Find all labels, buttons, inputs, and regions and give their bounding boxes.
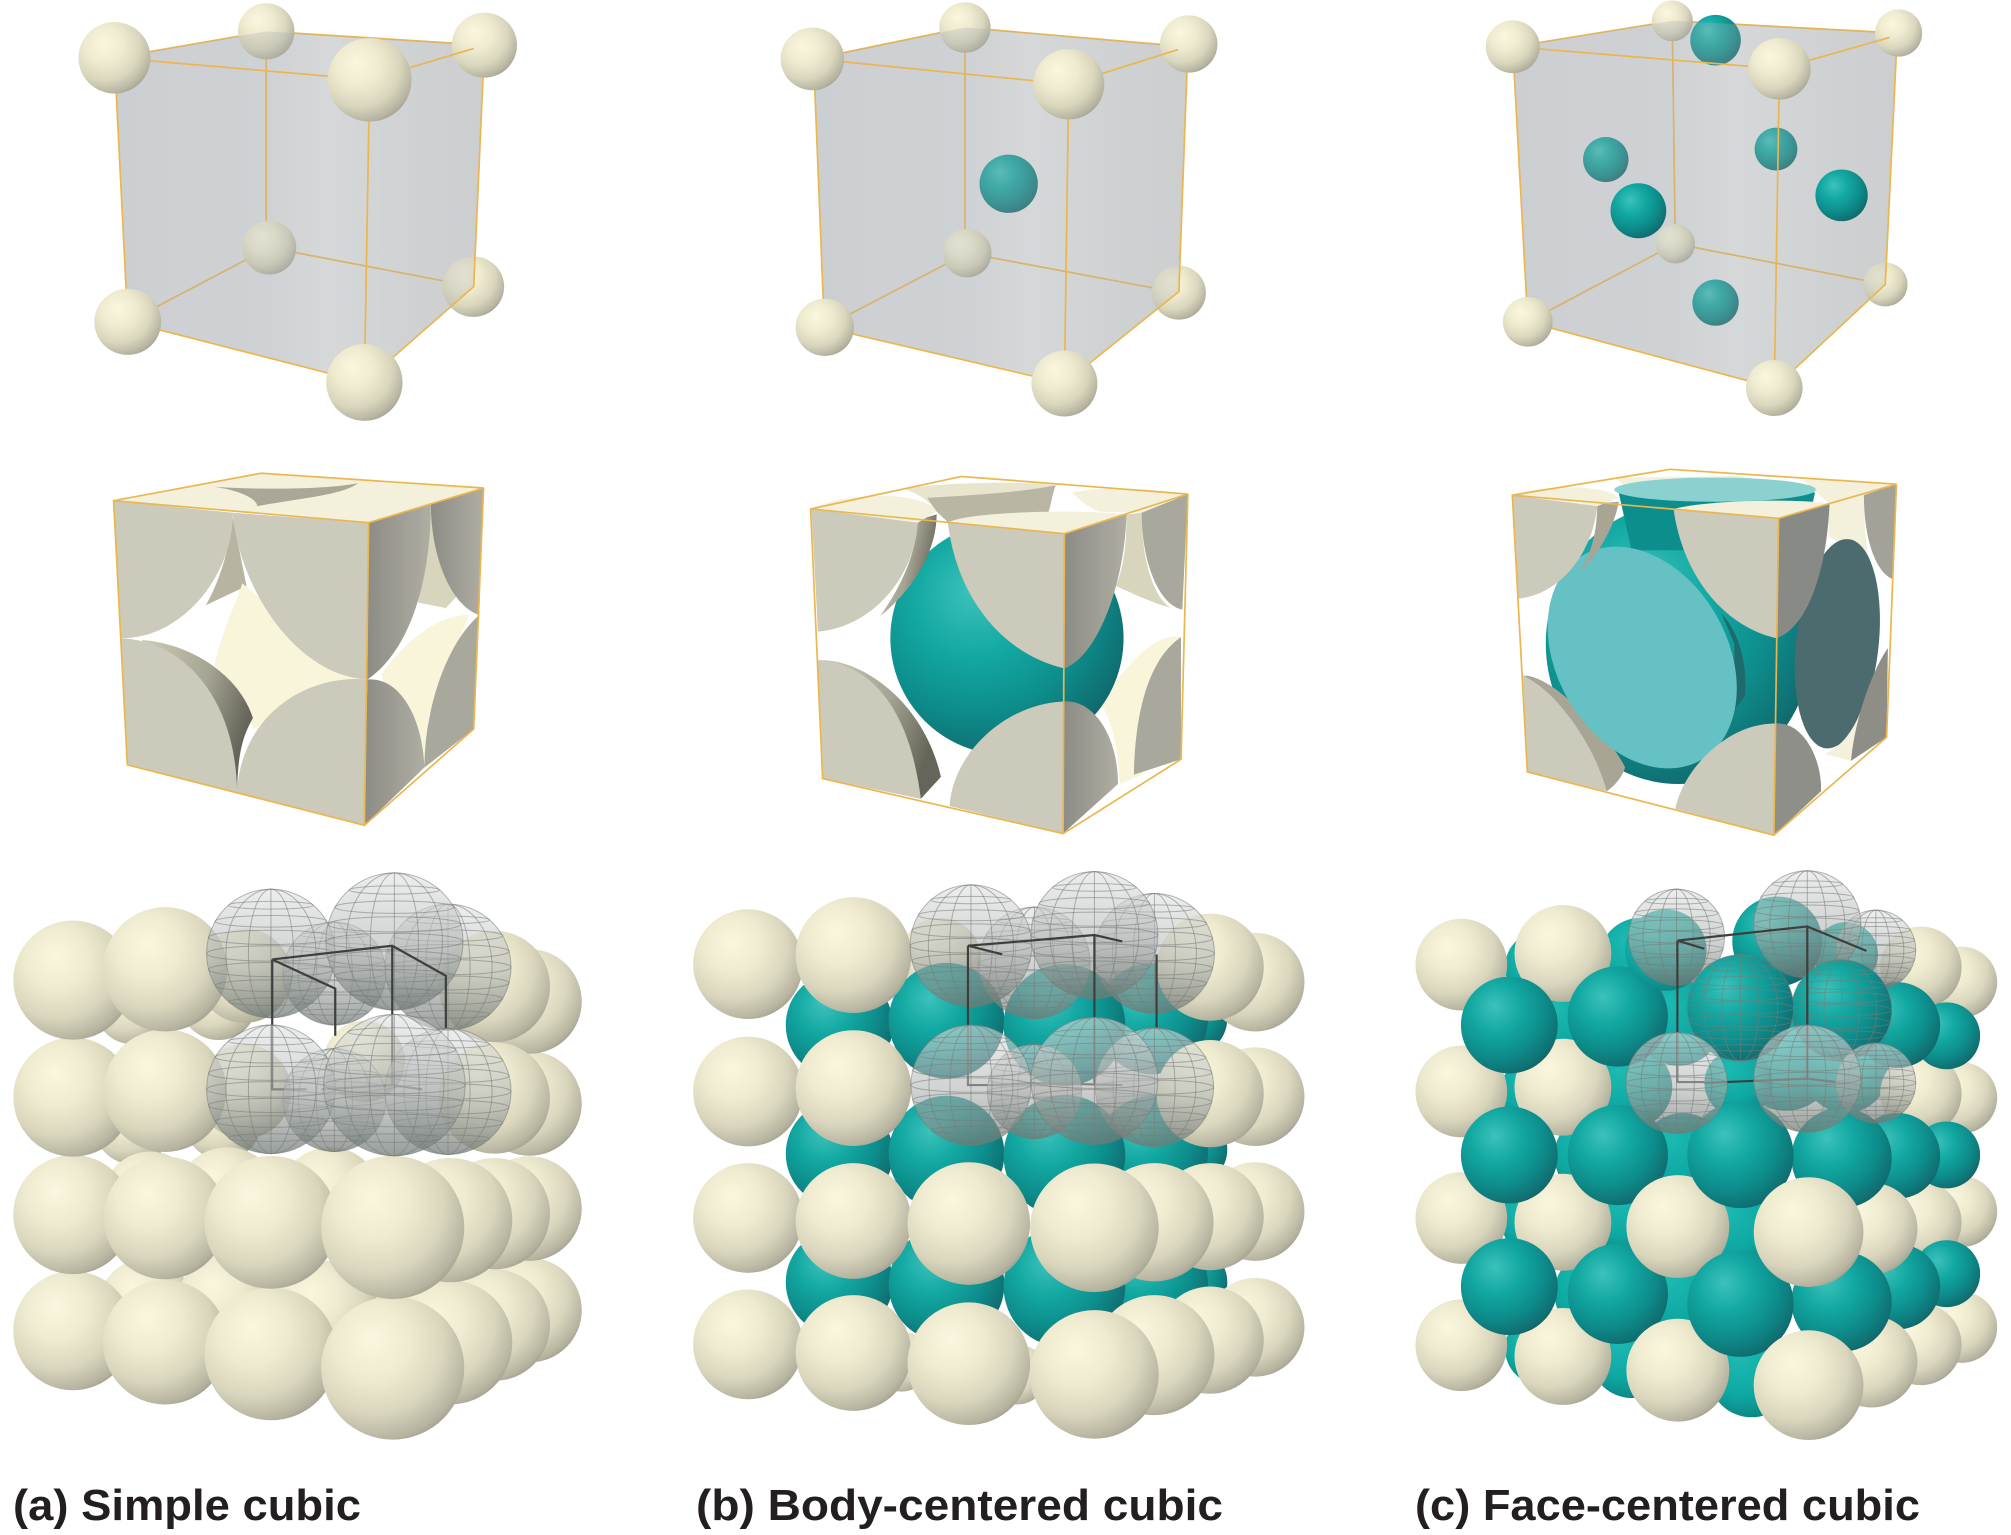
caption: face-centered cubic: (c) Face-centered cubic bbox=[1415, 1481, 1920, 1530]
teal face atoms: front bbox=[1611, 169, 1868, 238]
panel: body-centered cubic column bbox=[693, 2, 1304, 1530]
cut-away unit cell: face-centered cubic bbox=[1512, 469, 1896, 835]
packed lattice: face-centered cubic bbox=[1415, 871, 1997, 1440]
caption: simple cubic: (a) Simple cubic bbox=[13, 1481, 361, 1530]
deep teal atoms bbox=[1501, 918, 1889, 1417]
ball and stick unit cell: body-centered cubic bbox=[781, 2, 1217, 417]
caption: body-centered cubic: (b) Body-centered cubic bbox=[696, 1481, 1223, 1530]
transparent spheres with unit cell bbox=[1625, 871, 1916, 1134]
ball and stick unit cell: face-centered cubic bbox=[1486, 1, 1922, 416]
ball and stick unit cell: simple cubic bbox=[78, 3, 517, 421]
transparent spheres with unit cell bbox=[910, 872, 1214, 1146]
panel: face-centered cubic column bbox=[1415, 1, 1997, 1530]
cut-away unit cell: body-centered cubic bbox=[811, 476, 1188, 834]
central teal sphere bbox=[890, 522, 1124, 755]
packed lattice: simple cubic bbox=[13, 873, 582, 1440]
transparent spheres with unit cell bbox=[207, 873, 511, 1156]
packed lattice: body-centered cubic bbox=[693, 872, 1304, 1439]
panel: simple cubic column bbox=[13, 3, 582, 1530]
central teal atom bbox=[980, 155, 1038, 213]
teal face atoms: back bbox=[1583, 15, 1797, 326]
cut-away unit cell: simple cubic bbox=[114, 473, 484, 825]
teal body-centre atoms bbox=[786, 963, 1227, 1347]
